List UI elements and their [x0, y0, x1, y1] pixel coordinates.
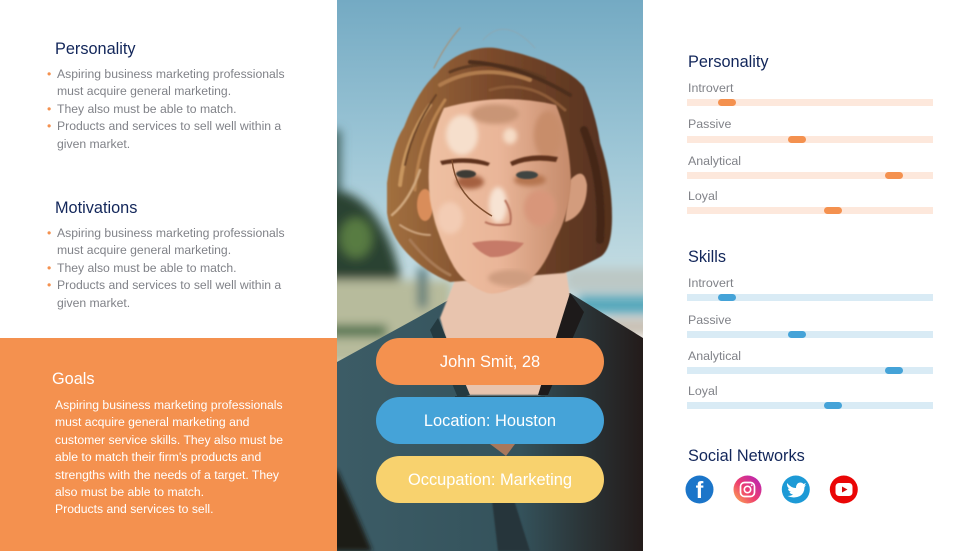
- shirt: [337, 293, 643, 551]
- text block: goals description: customer service skills. They also must be: [55, 433, 283, 447]
- bar: loyal: [687, 207, 933, 214]
- bar: introvert: [687, 99, 933, 106]
- text block: motivations bullets: given market.: [57, 296, 130, 310]
- label: loyal: Loyal: [688, 189, 718, 203]
- label: skills analytical: Analytical: [688, 349, 741, 363]
- text block: motivations bullets: must acquire general marketing.: [57, 243, 231, 257]
- neck: [440, 270, 570, 395]
- eyebrows: [440, 155, 558, 166]
- nose: [485, 200, 511, 225]
- mouth: [472, 240, 524, 257]
- pill: name: John Smit, 28: [440, 353, 540, 371]
- pill: occupation: [376, 456, 604, 503]
- text: •: [47, 119, 51, 133]
- text block: goals description: Products and services to sell.: [55, 502, 214, 516]
- face: [429, 99, 571, 294]
- text: •: [47, 102, 51, 116]
- heading: personality right: Personality: [688, 53, 769, 71]
- heading: motivations: Motivations: [55, 199, 137, 217]
- icon: facebook: [686, 476, 714, 504]
- pill: location: Location: Houston: [424, 412, 556, 430]
- text block: personality bullets: must acquire general marketing.: [57, 84, 231, 98]
- pill: name: [376, 338, 604, 385]
- hair back: [387, 48, 612, 282]
- text block: goals description: Aspiring business marketing professionals: [55, 398, 283, 412]
- bar: skills loyal: [687, 402, 933, 409]
- label: skills loyal: Loyal: [688, 384, 718, 398]
- trees and park background: [310, 130, 665, 365]
- bar: skills passive: [687, 331, 933, 338]
- label: analytical: Analytical: [688, 154, 741, 168]
- eyes: [456, 170, 476, 178]
- chin shadow: [488, 270, 532, 286]
- text: •: [47, 67, 51, 81]
- text: •: [47, 278, 51, 292]
- text: •: [47, 226, 51, 240]
- text block: goals description: strengths with the needs of a target. They: [55, 468, 279, 482]
- hair highlights: [392, 28, 601, 275]
- text block: personality bullets: They also must be able to match.: [57, 102, 237, 116]
- text block: motivations bullets: They also must be able to match.: [57, 261, 237, 275]
- icon: youtube: [830, 476, 858, 504]
- text block: motivations bullets: Aspiring business marketing professionals: [57, 226, 285, 240]
- text block: goals description: must acquire general marketing and: [55, 415, 249, 429]
- text block: goals description: [55, 398, 283, 516]
- pill: location: [376, 397, 604, 444]
- text block: personality bullets: given market.: [57, 137, 130, 151]
- panel: goals background: [0, 338, 337, 551]
- bar: skills introvert: [687, 294, 933, 301]
- sky: [337, 0, 643, 300]
- icon: facebook: f: [696, 477, 704, 503]
- bar: skills analytical: [687, 367, 933, 374]
- label: introvert: Introvert: [688, 81, 733, 95]
- text block: motivations bullets: Products and services to sell well within a: [57, 278, 281, 292]
- pill: occupation: Occupation: Marketing: [408, 471, 572, 489]
- bar: analytical: [687, 172, 933, 179]
- label: passive: Passive: [688, 117, 731, 131]
- label: skills introvert: Introvert: [688, 276, 733, 290]
- text block: goals description: also must be able to match.: [55, 485, 204, 499]
- hair strands over face: [452, 160, 492, 216]
- heading: personality left: Personality: [55, 40, 136, 58]
- text: •: [47, 261, 51, 275]
- text block: personality bullets: Products and services to sell well within a: [57, 119, 281, 133]
- label: skills passive: Passive: [688, 313, 731, 327]
- text block: personality bullets: [47, 67, 285, 151]
- facial shading: [437, 104, 562, 234]
- ears: [417, 189, 433, 221]
- text block: goals description: able to match their firm's products and: [55, 450, 261, 464]
- icon: twitter: [782, 476, 810, 504]
- portrait photo illustration: [337, 0, 643, 551]
- text block: personality bullets: Aspiring business marketing professionals: [57, 67, 285, 81]
- heading: goals: Goals: [52, 370, 95, 388]
- heading: skills: Skills: [688, 248, 726, 266]
- text block: motivations bullets: [47, 226, 285, 310]
- icon: instagram: [734, 476, 762, 504]
- heading: social networks: Social Networks: [688, 447, 805, 465]
- bar: passive: [687, 136, 933, 143]
- social icons: [686, 476, 858, 504]
